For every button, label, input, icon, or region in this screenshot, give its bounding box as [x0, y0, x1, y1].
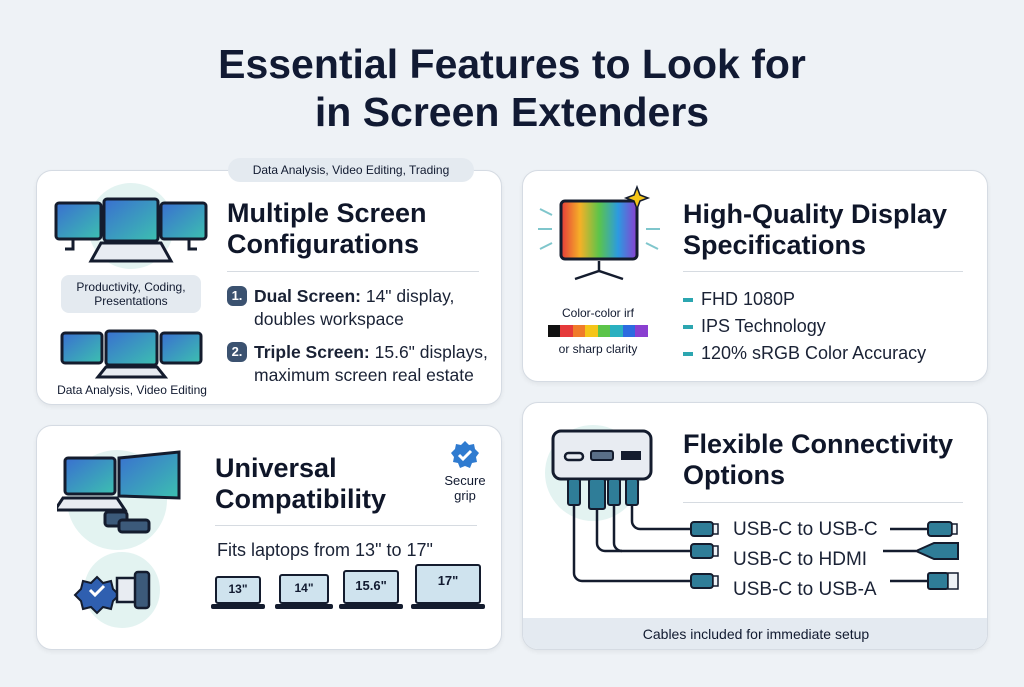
cable labels: USB-C to USB-C — [733, 519, 878, 540]
item 2 — [227, 342, 488, 385]
panel: universal compatibility — [36, 425, 502, 650]
heading: Configurations — [227, 229, 419, 259]
icons: laptop sizes: 13" — [228, 582, 248, 596]
item 1: doubles workspace — [254, 309, 404, 329]
item 2: maximum screen real estate — [254, 365, 474, 385]
badge: secure grip: Secure — [444, 473, 486, 488]
label: productivity — [61, 275, 201, 313]
icons: laptop sizes: 15.6" — [355, 578, 387, 593]
spec list: IPS Technology — [701, 316, 826, 336]
panel: multiple screen configurations — [36, 170, 502, 405]
heading: Compatibility — [215, 484, 386, 514]
item 1: 1. — [232, 288, 242, 303]
heading: Multiple Screen — [227, 198, 427, 228]
caption: colour swatch: Color-color irf or sharp clarity — [559, 306, 637, 356]
item 1: Dual Screen: 14" display, — [254, 286, 454, 306]
icon: colourful monitor — [538, 185, 660, 280]
label: productivity: Productivity, Coding, — [76, 280, 186, 294]
spec list: 120% sRGB Color Accuracy — [701, 343, 926, 363]
cable labels — [733, 519, 878, 600]
heading: Flexible Connectivity — [683, 429, 953, 459]
heading: Specifications — [683, 230, 866, 260]
label: data analysis: Data Analysis, Video Editing — [57, 383, 207, 397]
badge: secure grip: grip — [454, 488, 476, 503]
spec list — [683, 289, 926, 363]
title: in Screen Extenders — [315, 89, 709, 135]
heading: High-Quality Display — [683, 199, 947, 229]
tag pill — [228, 158, 474, 182]
heading: Options — [683, 460, 785, 490]
icon: triple monitor laptop top — [54, 183, 208, 269]
icon: hub with cables — [545, 425, 959, 590]
heading — [683, 199, 947, 260]
cable labels: USB-C to HDMI — [733, 549, 867, 570]
title — [218, 41, 806, 135]
footer: cables included — [523, 618, 989, 651]
badge: secure grip — [444, 441, 486, 503]
title: Essential Features to Look for — [218, 41, 806, 87]
heading — [215, 453, 386, 514]
item 2: Triple Screen: 15.6" displays, — [254, 342, 488, 362]
icon: triple monitor laptop bottom — [60, 330, 202, 378]
icons: laptop sizes: 14" — [294, 581, 314, 595]
icon: laptop with clamp — [57, 450, 180, 628]
spec list: FHD 1080P — [701, 289, 795, 309]
icons: laptop sizes: 17" — [438, 573, 458, 588]
panel: flexible connectivity — [522, 402, 988, 650]
heading — [683, 429, 953, 490]
item 1 — [227, 286, 454, 329]
text: fits laptops: Fits laptops from 13" to 17" — [217, 540, 433, 560]
item 2: 2. — [232, 344, 242, 359]
icons: laptop sizes — [211, 564, 485, 609]
footer: cables included: Cables included for immediate setup — [643, 626, 869, 642]
panel: high-quality display — [522, 170, 988, 382]
cable labels: USB-C to USB-A — [733, 579, 877, 600]
label: productivity: Presentations — [94, 294, 168, 308]
tag pill: Data Analysis, Video Editing, Trading — [253, 163, 449, 177]
heading — [227, 198, 427, 259]
heading: Universal — [215, 453, 337, 483]
